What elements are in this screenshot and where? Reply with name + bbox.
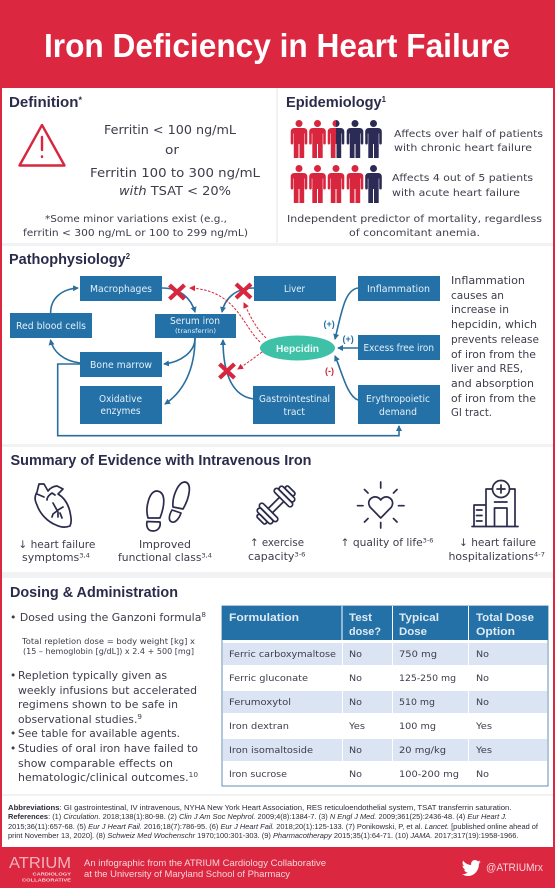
- labels: stimulation signs: (-): [325, 366, 334, 376]
- text: acute statistic: Affects 4 out of 5 patients: [392, 173, 533, 184]
- text: symptoms: ↓ heart failure: [18, 539, 95, 551]
- text: exercise capacity: ↑ exercise: [250, 537, 304, 549]
- box: bone marrow: Bone marrow: [90, 360, 152, 371]
- panel: abbreviations and references: print November 13, 2020]. (8) Schweiz Med Wochenschr 1970;100:301-303. (9) Pharmacotherapy 2015;35(1):64-71. (10) JAMA. 2017;317(19):1958-1966.: [8, 831, 518, 840]
- icon: footprints: [147, 482, 189, 531]
- text: pathophysiology summary: and absorption: [451, 378, 534, 390]
- text: symptoms: symptoms: [22, 552, 77, 564]
- text: ferritin criteria: Ferritin < 100 ng/mL: [104, 122, 236, 137]
- text: dosing bullets: regimens shown to be safe in: [18, 699, 178, 711]
- arrows: hepcidin inhibition: [190, 288, 266, 369]
- box: gastrointestinal tract: tract: [284, 407, 305, 418]
- labels: stimulation signs: (+): [342, 334, 354, 344]
- text: acute statistic: [392, 173, 533, 199]
- text: hospitalizations: ↓ heart failure: [459, 537, 536, 549]
- box: excess free iron: Excess free iron: [364, 343, 434, 354]
- table: iv iron formulations: [222, 606, 548, 786]
- table row shading: [223, 643, 547, 761]
- text: twitter handle: @ATRIUMrx: [486, 862, 543, 874]
- node: hepcidin: Hepcidin: [276, 343, 319, 355]
- text: dosing bullets: observational studies.: [18, 714, 134, 726]
- panel: dosing and administration: [2, 578, 553, 794]
- text: hospitalizations: 4-7: [534, 550, 545, 558]
- box: red blood cells: Red blood cells: [16, 321, 86, 332]
- table rows: Yes: [475, 746, 492, 756]
- heading: pathophysiology: Pathophysiology: [9, 251, 130, 268]
- text: pathophysiology summary: GI tract.: [451, 407, 492, 419]
- text: dosing bullets: hematologic/clinical outcomes.: [18, 772, 181, 784]
- table rows: Iron isomaltoside: [229, 746, 313, 756]
- table header: Total Dose: [476, 612, 534, 624]
- text: functional class: functional class: [118, 552, 200, 564]
- box: red blood cells: [10, 313, 92, 338]
- table rows: Ferric gluconate: [229, 674, 308, 684]
- logo: atrium: COLLABORATIVE: [22, 878, 71, 882]
- text: dosing bullets: 10: [189, 771, 198, 779]
- diagram: iron pathway: [10, 276, 440, 436]
- icon: heart: [35, 484, 71, 527]
- text: footnote: [23, 214, 248, 239]
- heading: definition: *: [78, 95, 82, 105]
- text: exercise capacity: [248, 537, 306, 563]
- arrows: iron flow: [51, 288, 399, 436]
- text: pathophysiology summary: [451, 275, 539, 419]
- text: pathophysiology summary: prevents release: [451, 334, 539, 346]
- box: macrophages: Macrophages: [90, 284, 152, 295]
- text: mortality predictor: Independent predictor of mortality, regardless: [287, 214, 542, 225]
- text: chronic statistic: [394, 129, 543, 154]
- table rows: No: [349, 770, 363, 780]
- text: symptoms: [18, 539, 95, 564]
- text: pathophysiology summary: causes an: [451, 290, 504, 302]
- icon: dumbbell: [252, 481, 300, 529]
- box: erythropoietic demand: Erythropoietic: [366, 394, 430, 405]
- text: functional class: [118, 539, 212, 564]
- text: attribution: An infographic from the ATRIUM Cardiology Collaborative: [84, 858, 326, 869]
- labels: stimulation signs: [324, 319, 354, 376]
- table rows: No: [476, 650, 490, 660]
- icon: hospital: [472, 480, 518, 526]
- panel: abbreviations and references: References: (1) Circulation. 2018;138(1):80-98. (2) Clin J Am Soc Nephrol. 2009;4(8):1384-7. (3) N Engl J Med. 2009;361(25):2436-48. (4) Eur Heart J.: [8, 812, 507, 821]
- text: pathophysiology summary: of iron from the: [451, 349, 536, 361]
- text: ferritin criteria: [90, 122, 260, 198]
- table header: Option: [476, 626, 515, 638]
- text: symptoms: 3,4: [79, 552, 90, 560]
- text: hospitalizations: [448, 537, 545, 563]
- text: exercise capacity: capacity: [248, 551, 292, 563]
- text: pathophysiology summary: of iron from the: [451, 393, 536, 405]
- box: bone marrow: [80, 352, 162, 377]
- table rows: 100 mg: [399, 722, 436, 732]
- title: Iron Deficiency in Heart Failure: [44, 27, 510, 64]
- table header: dose?: [349, 626, 381, 638]
- text: ganzoni formula: Total repletion dose = body weight [kg] x: [21, 637, 196, 646]
- text: exercise capacity: 3-6: [294, 550, 306, 558]
- table rows: Yes: [475, 722, 492, 732]
- table header: [222, 606, 548, 640]
- table rows: No: [349, 650, 363, 660]
- text: attribution: at the University of Maryland School of Pharmacy: [84, 869, 290, 880]
- text: footnote: *Some minor variations exist (e.g.,: [45, 214, 227, 225]
- node: hepcidin: [260, 336, 335, 360]
- box: oxidative enzymes: [80, 386, 162, 424]
- panel: abbreviations and references: 2015;36(11):657-68. (5) Eur J Heart Fail. 2016;18(7):786-95. (6) Eur J Heart Fail. 2018;20(1):125-133. (7) Ponikowski, P, et al. Lancet. [published online ahead of: [8, 822, 539, 831]
- text: dosing bullets: Repletion typically given as: [18, 670, 167, 682]
- text: attribution: [84, 858, 326, 880]
- icon: twitter bird: [462, 860, 481, 876]
- icon: warning triangle: [20, 125, 64, 166]
- table rows: No: [476, 674, 490, 684]
- box: liver: Liver: [284, 284, 305, 295]
- text: ganzoni bullet: 8: [201, 611, 206, 619]
- table rows: Yes: [348, 722, 365, 732]
- text: ganzoni formula: [21, 637, 196, 656]
- table rows: Iron dextran: [229, 722, 289, 732]
- text: dosing bullets: [10, 670, 198, 784]
- box: oxidative enzymes: Oxidative: [99, 394, 142, 405]
- panel: epidemiology: [278, 88, 553, 243]
- text: pathophysiology summary: liver and RES,: [451, 363, 523, 375]
- table rows: 100-200 mg: [399, 770, 459, 780]
- footer: [9, 855, 543, 882]
- table rows: No: [476, 698, 490, 708]
- table rows: No: [349, 746, 363, 756]
- text: dosing bullets: weekly infusions but accelerated: [18, 685, 197, 697]
- table rows: 125-250 mg: [399, 674, 456, 684]
- table rows: No: [476, 770, 490, 780]
- heading: epidemiology: 1: [382, 95, 387, 104]
- table header: Test: [349, 612, 372, 624]
- heading: dosing and administration: Dosing & Administration: [10, 584, 178, 601]
- text: dosing bullets: •: [10, 743, 16, 755]
- text: acute statistic: with acute heart failure: [392, 188, 520, 199]
- table rows: 750 mg: [399, 650, 437, 660]
- text: chronic statistic: Affects over half of patients: [394, 129, 543, 140]
- box: serum iron: (transferrin): [175, 328, 216, 335]
- text: pathophysiology summary: hepcidin, which: [451, 319, 537, 331]
- box: inflammation: Inflammation: [367, 284, 430, 295]
- panel: pathophysiology: [2, 246, 553, 444]
- table header: Dose: [399, 626, 427, 638]
- text: ganzoni formula: (15 – hemoglobin [g/dL]) x 2.4 + 500 [mg]: [23, 647, 194, 656]
- table rows: 20 mg/kg: [399, 746, 446, 756]
- panel: definition: [2, 88, 276, 243]
- text: ferritin criteria: or: [165, 142, 180, 157]
- box: inflammation: [358, 276, 440, 301]
- text: dosing bullets: •: [10, 728, 16, 740]
- box: gastrointestinal tract: [253, 386, 335, 424]
- text: footnote: ferritin < 300 ng/mL or 100 to 299 ng/mL): [23, 228, 248, 239]
- icon: people row acute: [291, 165, 382, 203]
- box: liver: [254, 276, 336, 301]
- text: ganzoni bullet: • Dosed using the Ganzoni formula: [10, 612, 195, 624]
- box: erythropoietic demand: demand: [379, 407, 417, 418]
- box: erythropoietic demand: [358, 385, 440, 424]
- text: pathophysiology summary: Inflammation: [451, 275, 525, 287]
- box: excess free iron: [358, 335, 440, 360]
- box: gastrointestinal tract: Gastrointestinal: [259, 394, 330, 405]
- heading: pathophysiology: 2: [126, 252, 131, 261]
- text: chronic statistic: with chronic heart failure: [394, 143, 532, 154]
- labels: stimulation signs: (+): [324, 319, 335, 329]
- logo: atrium: ATRIUM: [9, 855, 71, 872]
- box: oxidative enzymes: enzymes: [100, 406, 141, 417]
- table header: Typical: [399, 612, 439, 624]
- text: functional class: 3,4: [201, 552, 212, 560]
- table rows: 510 mg: [399, 698, 435, 708]
- table rows: No: [349, 698, 363, 708]
- text: functional class: Improved: [139, 539, 191, 551]
- text: ferritin criteria: Ferritin 100 to 300 ng/mL: [90, 165, 260, 180]
- table rows: [229, 650, 492, 780]
- logo: atrium: [9, 855, 71, 882]
- icon: blocked crosses: [170, 284, 251, 378]
- panel: summary of evidence: [2, 447, 553, 572]
- text: hospitalizations: hospitalizations: [448, 551, 531, 563]
- text: quality of life: ↑ quality of life: [340, 537, 421, 549]
- box: serum iron: Serum iron: [170, 316, 220, 327]
- icon: people row chronic: [291, 120, 382, 158]
- heading: definition: Definition: [9, 94, 78, 111]
- table header: Formulation: [229, 612, 299, 624]
- icon: heart with rays: [358, 482, 404, 528]
- box: serum iron: [155, 314, 236, 338]
- text: dosing bullets: Studies of oral iron have failed to: [18, 743, 198, 755]
- text: dosing bullets: See table for available agents.: [18, 728, 180, 740]
- heading: summary of evidence: Summary of Evidence with Intravenous Iron: [10, 452, 312, 469]
- text: ferritin criteria: with TSAT < 20%: [119, 183, 231, 198]
- text: mortality predictor: [287, 214, 542, 239]
- text: mortality predictor: of concomitant anemia.: [349, 228, 480, 239]
- panel: abbreviations and references: Abbreviations: GI gastrointestinal, IV intravenous, NYHA New York Heart Association, RES reticuloendothelial system, TSAT transferrin saturation.: [8, 803, 512, 812]
- panel: abbreviations and references: [2, 796, 553, 847]
- text: pathophysiology summary: increase in: [451, 304, 509, 316]
- text: dosing bullets: 9: [137, 713, 142, 721]
- heading: epidemiology: Epidemiology: [286, 94, 384, 111]
- text: dosing bullets: •: [10, 670, 16, 682]
- table rows: Ferric carboxymaltose: [229, 650, 336, 660]
- table rows: Ferumoxytol: [229, 698, 291, 708]
- box: macrophages: [80, 276, 162, 301]
- text: dosing bullets: show comparable effects on: [18, 758, 173, 770]
- table rows: No: [349, 674, 363, 684]
- logo: atrium: CARDIOLOGY: [32, 872, 71, 876]
- text: quality of life: 3-6: [423, 536, 434, 544]
- table rows: Iron sucrose: [229, 770, 287, 780]
